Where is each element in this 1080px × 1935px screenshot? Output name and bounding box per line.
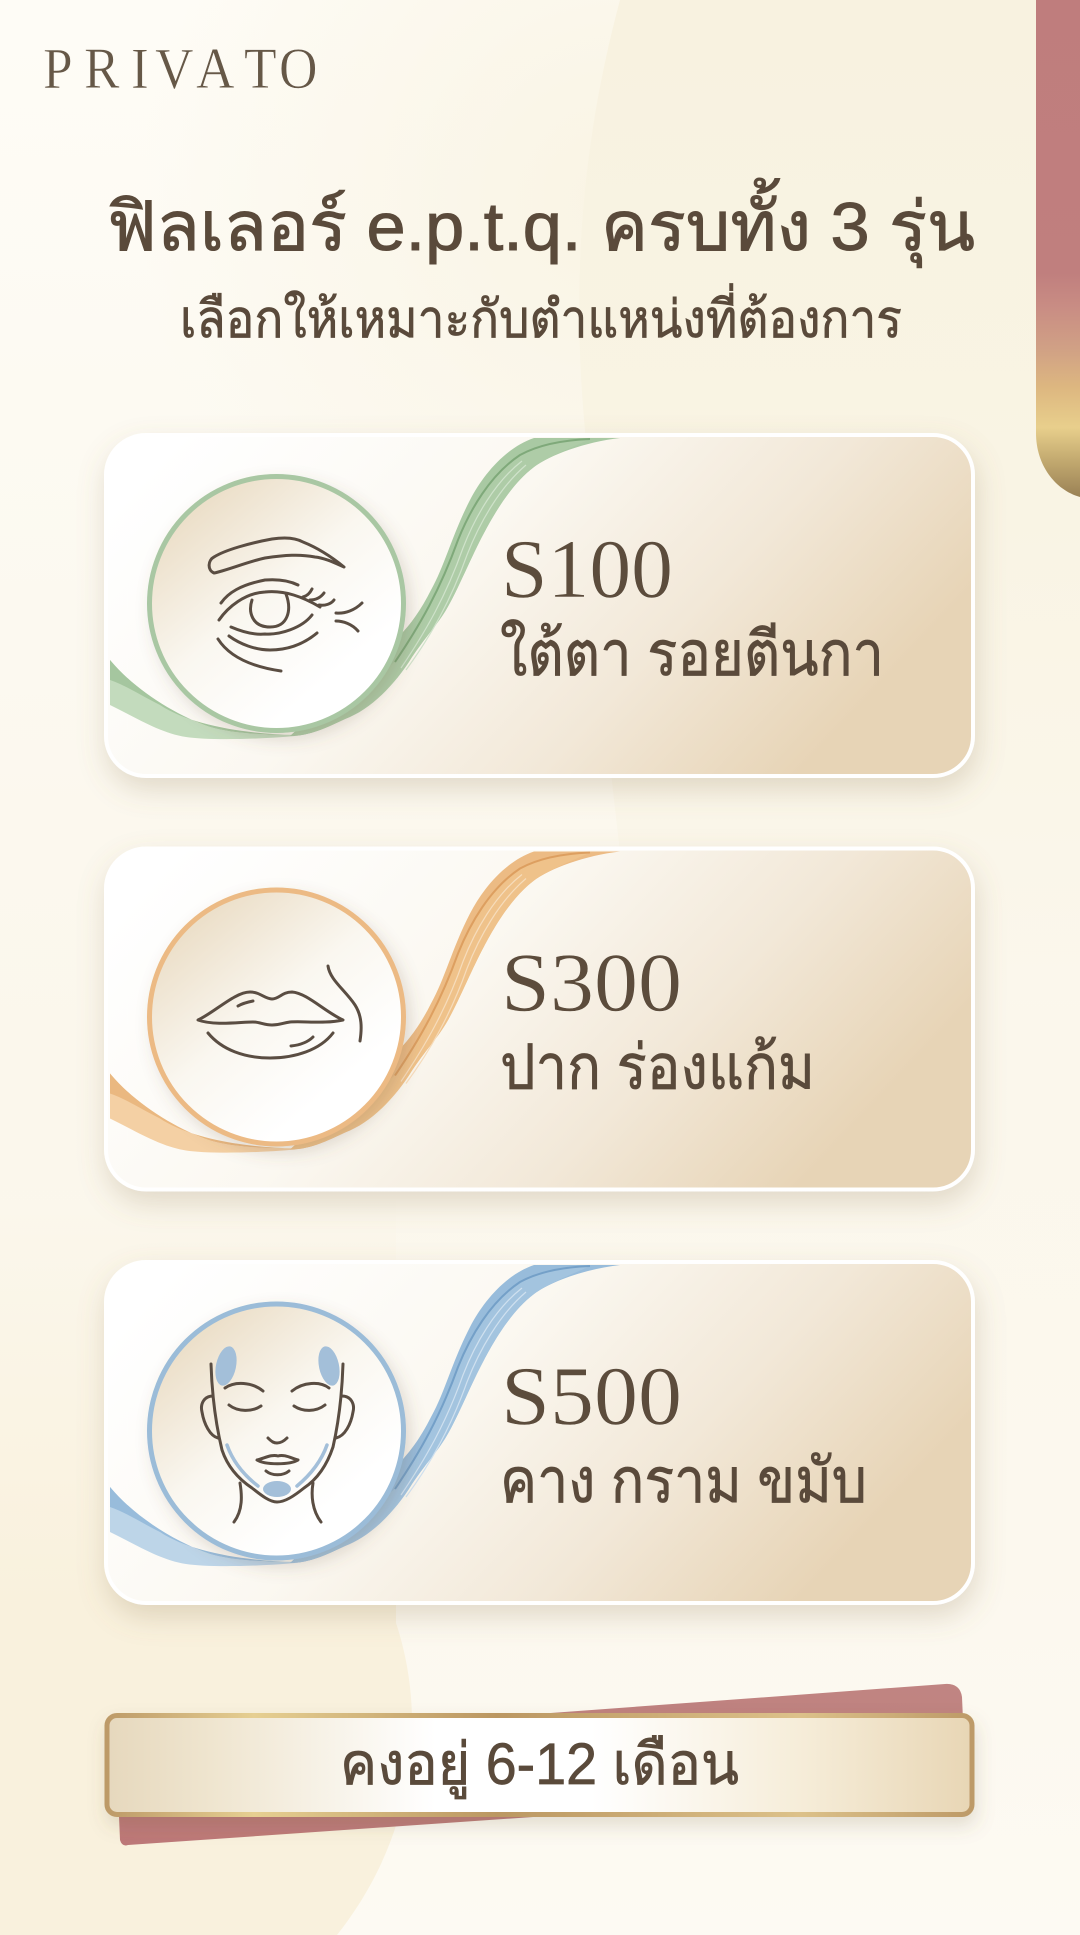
title: ฟิลเลอร์ e.p.t.q. ครบทั้ง 3 รุ่น [107, 178, 975, 268]
card background [106, 848, 973, 1190]
icon: lips circle [150, 890, 404, 1144]
banner: longevity [107, 1684, 972, 1845]
duration text: คงอยู่ 6-12 เดือน [340, 1732, 739, 1799]
card background [106, 435, 973, 776]
areas: under-eye, crow's feet: ใต้ตา รอยตีนกา [500, 619, 884, 689]
panel: S500 [106, 1262, 973, 1603]
subtitle: เลือกให้เหมาะกับตำแหน่งที่ต้องการ [180, 283, 902, 349]
label S100: S100 [501, 523, 673, 616]
ribbon: orange [110, 852, 620, 1153]
areas: chin, jawline, temples: คาง กราม ขมับ [500, 1447, 867, 1516]
gold framed bar [107, 1716, 972, 1814]
icon: face circle [150, 1304, 404, 1558]
label S500: S500 [501, 1350, 682, 1443]
decorative corner band [1036, 0, 1080, 497]
label S300: S300 [501, 936, 682, 1030]
card background [106, 1262, 973, 1603]
logo: PRIVATO: PRIVATO [43, 37, 318, 102]
icon: eye circle [150, 476, 404, 730]
areas: lips, nasolabial folds: ปาก ร่องแก้ม [500, 1034, 815, 1102]
panel: S300 [106, 848, 973, 1190]
ribbon: rose backing [116, 1684, 966, 1845]
ribbon: blue [110, 1265, 620, 1566]
panel: S100 [106, 435, 973, 776]
ribbon: green [110, 438, 620, 739]
